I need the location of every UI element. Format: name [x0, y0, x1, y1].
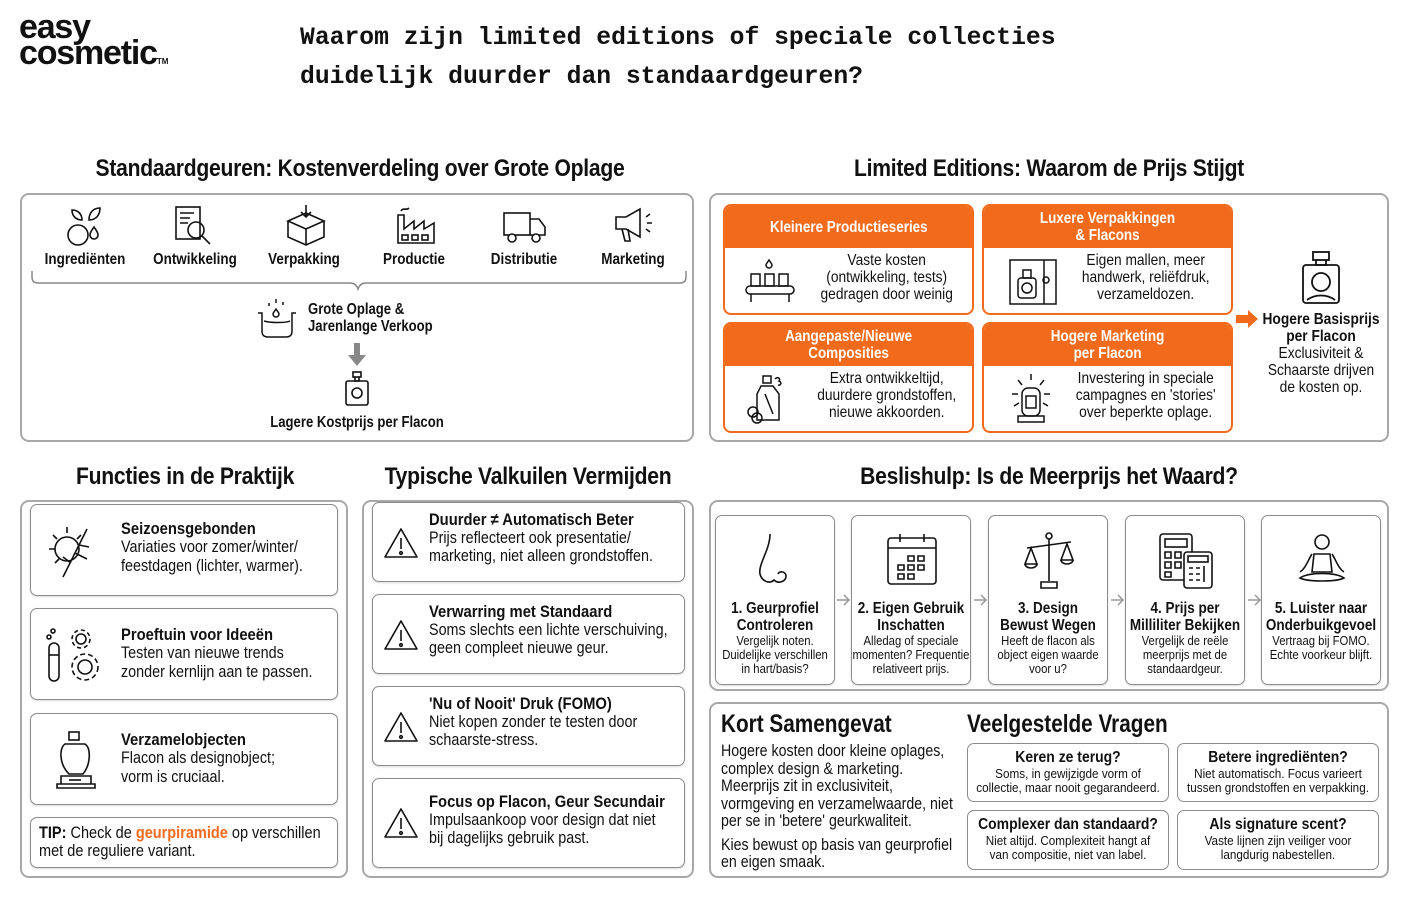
step 5: Vertraag bij FOMO. — [1272, 633, 1370, 648]
card: aangepaste composities: nieuwe akkoorden. — [829, 404, 944, 421]
faq 3: van compositie, niet van label. — [990, 847, 1146, 862]
tip box — [30, 817, 338, 868]
tip box: TIP: Check de geurpiramide op verschillen — [39, 824, 321, 842]
step 5 — [1261, 515, 1381, 685]
icon: bottle — [345, 371, 369, 406]
panel: functies — [20, 500, 348, 878]
step 2: 2. Eigen Gebruik — [858, 600, 964, 617]
card: seizoensgebonden — [30, 504, 338, 596]
faq 4: langdurig nabestellen. — [1221, 847, 1335, 862]
card: seizoensgebonden: Variaties voor zomer/winter/ — [121, 538, 298, 556]
icon: sun/snow — [49, 527, 90, 578]
faq 2 — [1177, 743, 1379, 802]
card: verzamelobjecten: Flacon als designobject; — [121, 749, 275, 767]
faq 1: collectie, maar nooit gegarandeerd. — [976, 780, 1160, 795]
icon: calculators — [1159, 533, 1213, 589]
icon: nose — [759, 534, 787, 583]
text: grote oplage: Jarenlange Verkoop — [308, 318, 433, 335]
icon row — [45, 205, 665, 268]
text: lagere kostprijs: Lagere Kostprijs per Flacon — [270, 414, 444, 431]
card: fomo: 'Nu of Nooit' Druk (FOMO) — [429, 694, 612, 713]
panel: standaardgeuren — [20, 193, 694, 442]
card: verzamelobjecten — [30, 713, 338, 805]
title: duidelijk duurder dan standaardgeuren? — [300, 63, 863, 91]
heading: limited editions: Limited Editions: Waarom de Prijs Stijgt — [854, 155, 1244, 182]
icon: ingredients — [67, 207, 101, 246]
step 4: standaardgeur. — [1147, 661, 1223, 676]
card: proeftuin: Proeftuin voor Ideeën — [121, 625, 273, 644]
brace — [31, 271, 687, 292]
text: samenvatting: vormgeving en verzamelwaarde, niet — [721, 794, 953, 812]
logo — [19, 8, 168, 72]
text: hogere basisprijs: de kosten op. — [1280, 379, 1362, 396]
icon: production — [397, 207, 435, 244]
text: samenvatting — [721, 742, 953, 871]
card: seizoensgebonden: feestdagen (lichter, warmer). — [121, 557, 303, 575]
card: fomo: Niet kopen zonder te testen door — [429, 713, 637, 731]
icon: warning — [384, 808, 418, 838]
card: aangepaste composities: Aangepaste/Nieuwe — [785, 328, 912, 345]
heading: standaardgeuren: Standaardgeuren: Kostenverdeling over Grote Oplage — [95, 155, 624, 182]
arrow — [974, 594, 987, 606]
card: duurder: marketing, niet alleen grondstoffen. — [429, 547, 653, 565]
card: duurder: Prijs reflecteert ook presentatie/ — [429, 529, 631, 547]
step 3: voor u? — [1029, 661, 1067, 676]
card: focus op flacon: Focus op Flacon, Geur Secundair — [429, 792, 665, 811]
icon: development — [175, 206, 210, 245]
panel: samenvatting & FAQ — [709, 702, 1389, 878]
heading: functies: Functies in de Praktijk — [76, 463, 294, 490]
step 4: meerprijs met de — [1143, 647, 1227, 662]
card: hogere marketing: Hogere Marketing — [1051, 328, 1164, 345]
step 1: 1. Geurprofiel — [731, 600, 819, 617]
text: hogere basisprijs: Hogere Basisprijs — [1262, 311, 1380, 328]
icon: bottle large — [1302, 251, 1340, 304]
step 3: Bewust Wegen — [1000, 617, 1096, 634]
card: proeftuin: Testen van nieuwe trends — [121, 644, 284, 662]
tip box: met de reguliere variant. — [39, 842, 196, 860]
faq 3: Niet altijd. Complexiteit hangt af — [986, 833, 1150, 848]
text: samenvatting: per se in 'betere' geurkwaliteit. — [721, 812, 912, 830]
card: kleinere productieseries — [723, 204, 974, 315]
text: hogere basisprijs — [1262, 311, 1380, 396]
card: focus op flacon: bij dagelijks gebruik past. — [429, 829, 589, 847]
faq 4: Als signature scent? — [1209, 816, 1347, 833]
card: verzamelobjecten: Verzamelobjecten — [121, 730, 246, 749]
card: seizoensgebonden: Seizoensgebonden — [121, 519, 256, 538]
label: Productie: Productie — [383, 251, 445, 268]
card: luxere verpakkingen: verzameldozen. — [1097, 286, 1194, 303]
faq 2: Betere ingrediënten? — [1208, 749, 1348, 766]
step 1: Controleren — [737, 617, 813, 634]
step 3: 3. Design — [1018, 600, 1078, 617]
heading: beslishulp: Beslishulp: Is de Meerprijs het Waard? — [860, 463, 1238, 490]
panel: limited editions — [709, 193, 1389, 442]
icon: meditation — [1298, 534, 1346, 582]
label: Ingrediënten: Ingrediënten — [45, 251, 125, 268]
arrow — [1248, 594, 1261, 606]
card: duurder — [372, 502, 685, 582]
step 5: 5. Luister naar — [1275, 600, 1367, 617]
faq 1 — [967, 743, 1169, 802]
faq 1: Keren ze terug? — [1015, 749, 1121, 766]
text: hogere basisprijs: Exclusiviteit & — [1279, 345, 1363, 362]
card: kleinere productieseries: Vaste kosten — [847, 252, 926, 269]
step 4 — [1125, 515, 1245, 685]
text: hogere basisprijs: per Flacon — [1286, 328, 1356, 345]
icon: warning — [384, 712, 418, 742]
text: samenvatting: Hogere kosten door kleine oplages, — [721, 742, 944, 760]
card: proeftuin: zonder kernlijn aan te passen. — [121, 663, 313, 681]
card: verzamelobjecten: vorm is cruciaal. — [121, 768, 225, 786]
text: grote oplage — [308, 301, 433, 335]
card: luxere verpakkingen: & Flacons — [1075, 227, 1140, 244]
card: aangepaste composities: duurdere grondstoffen, — [817, 387, 956, 404]
heading: kort samengevat: Kort Samengevat — [721, 710, 892, 738]
panel: valkuilen — [362, 500, 694, 878]
text: samenvatting: Kies bewust op basis van geurprofiel — [721, 836, 952, 854]
card: hogere marketing: per Flacon — [1074, 345, 1141, 362]
heading: valkuilen: Typische Valkuilen Vermijden — [385, 463, 671, 490]
step 4: Vergelijk de reële — [1142, 633, 1228, 648]
faq 1: Soms, in gewijzigde vorm of — [995, 766, 1141, 781]
card: focus op flacon — [372, 778, 685, 868]
logo: cosmeticTM — [19, 34, 168, 72]
icon: test tube gears — [46, 628, 99, 682]
arrow: down — [348, 343, 366, 366]
label: Verpakking: Verpakking — [268, 251, 340, 268]
step 4: 4. Prijs per — [1151, 600, 1219, 617]
text: hogere basisprijs: Schaarste drijven — [1268, 362, 1374, 379]
icon: conveyor — [745, 258, 795, 302]
card: focus op flacon: Impulsaankoop voor design dat niet — [429, 811, 656, 829]
faq 4 — [1177, 810, 1379, 870]
icon: packaging — [286, 205, 326, 246]
card: verwarring: Soms slechts een lichte verschuiving, — [429, 621, 668, 639]
step 2 — [851, 515, 971, 685]
step 1: Vergelijk noten. — [736, 633, 814, 648]
card: aangepaste composities: Extra ontwikkeltijd, — [830, 370, 944, 387]
label: Marketing: Marketing — [601, 251, 665, 268]
card: luxere verpakkingen: Luxere Verpakkingen — [1040, 210, 1175, 227]
icon: spotlight bottle — [1012, 374, 1050, 423]
card: proeftuin — [30, 608, 338, 700]
logo: easy — [19, 8, 90, 46]
card: kleinere productieseries: gedragen door weinig — [821, 286, 953, 303]
faq 3: Complexer dan standaard? — [978, 816, 1158, 833]
icon: warning — [384, 620, 418, 650]
step 4: Milliliter Bekijken — [1130, 617, 1240, 634]
icon: distribution — [503, 212, 546, 243]
faq 4: Vaste lijnen zijn veiliger voor — [1205, 833, 1351, 848]
text: samenvatting: Meerprijs zit in exclusiviteit, — [721, 777, 893, 795]
arrow — [1111, 594, 1124, 606]
faq 2: Niet automatisch. Focus varieert — [1194, 766, 1362, 781]
card: fomo — [372, 686, 685, 766]
icon: trophy bottle — [56, 731, 96, 789]
card: luxere verpakkingen — [982, 204, 1233, 315]
card: luxere verpakkingen: Eigen mallen, meer — [1086, 252, 1205, 269]
step 1: Duidelijke verschillen — [722, 647, 828, 662]
card: hogere marketing: campagnes en 'stories' — [1076, 387, 1216, 404]
step 5: Echte voorkeur blijft. — [1270, 647, 1372, 662]
card: verwarring: Verwarring met Standaard — [429, 602, 612, 621]
title — [300, 24, 1056, 91]
step 3: Heeft de flacon als — [1001, 633, 1095, 648]
card: kleinere productieseries: Kleinere Productieseries — [770, 218, 927, 236]
card: luxere verpakkingen: handwerk, reliëfdruk, — [1082, 269, 1210, 286]
card: fomo: schaarste-stress. — [429, 731, 538, 749]
step 1 — [715, 515, 835, 685]
card: aangepaste composities — [723, 322, 974, 433]
icon: spray bottle — [747, 375, 782, 424]
card: verwarring: geen compleet nieuwe geur. — [429, 639, 609, 657]
step 2: relativeert prijs. — [873, 661, 949, 676]
card: hogere marketing: over beperkte oplage. — [1079, 404, 1212, 421]
step 2: Inschatten — [877, 617, 945, 634]
step 2: Alledag of speciale — [864, 633, 958, 648]
arrow: orange right — [1236, 310, 1258, 328]
step 5: Onderbuikgevoel — [1266, 617, 1376, 634]
card: hogere marketing: Investering in speciale — [1078, 370, 1214, 387]
icon: calendar — [887, 534, 937, 585]
heading: veelgestelde vragen: Veelgestelde Vragen — [967, 710, 1168, 738]
card: hogere marketing — [982, 322, 1233, 433]
step 3 — [988, 515, 1108, 685]
title: Waarom zijn limited editions of speciale collecties — [300, 24, 1056, 52]
icon: batch vat — [258, 299, 296, 338]
text: samenvatting: complex design & marketing. — [721, 760, 903, 778]
text: samenvatting: en eigen smaak. — [721, 853, 825, 871]
icon: marketing — [615, 208, 652, 242]
card: verwarring — [372, 594, 685, 674]
card: aangepaste composities: Composities — [808, 345, 889, 362]
step 1: in hart/basis? — [741, 661, 809, 676]
label: Distributie: Distributie — [491, 251, 557, 268]
faq 2: tussen grondstoffen en verpakking. — [1187, 780, 1369, 795]
icon: warning — [384, 528, 418, 558]
label: Ontwikkeling: Ontwikkeling — [153, 251, 237, 268]
step 3: object eigen waarde — [997, 647, 1099, 662]
icon: luxury box — [1009, 259, 1057, 305]
card: duurder: Duurder ≠ Automatisch Beter — [429, 510, 634, 529]
card: kleinere productieseries: (ontwikkeling, tests) — [826, 269, 947, 286]
arrow — [837, 594, 850, 606]
faq 3 — [967, 810, 1169, 870]
text: grote oplage: Grote Oplage & — [308, 301, 404, 318]
step 2: momenten? Frequentie — [853, 647, 969, 662]
icon: scale — [1024, 532, 1074, 589]
panel: beslishulp — [709, 500, 1389, 691]
